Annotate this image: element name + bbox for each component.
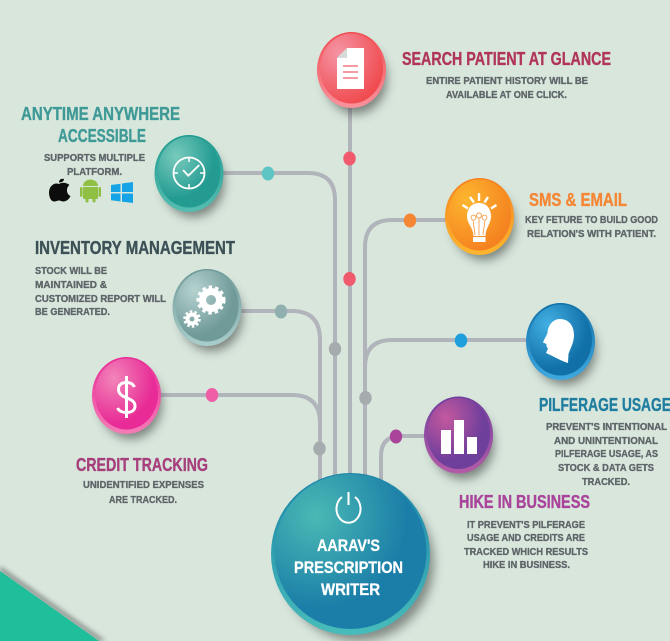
- text: search patient: ENTIRE PATIENT HISTORY WILL BE: [426, 75, 588, 87]
- corner triangle: [0, 566, 106, 641]
- text: inventory: [35, 238, 235, 318]
- node: pilferage usage: [526, 303, 596, 385]
- text: credit tracking: ARE TRACKED.: [109, 494, 177, 506]
- text: hike in business: [459, 492, 590, 571]
- icon: windows: [111, 182, 133, 203]
- main title: PRESCRIPTION: [294, 558, 403, 577]
- node: sms and email: [445, 178, 515, 260]
- text: inventory: MAINTAINED &: [35, 279, 107, 291]
- text: credit tracking: UNIDENTIFIED EXPENSES: [83, 479, 204, 491]
- text: pilferage usage: [539, 395, 670, 488]
- text: pilferage usage: TRACKED.: [582, 476, 630, 488]
- text: hike in business: HIKE IN BUSINESS: [459, 492, 590, 512]
- text: anytime anywhere: [21, 104, 180, 178]
- icon: apple: [49, 179, 70, 202]
- node: anytime anywhere: [154, 135, 224, 217]
- icon: document: [337, 48, 364, 89]
- node: inventory: [172, 269, 242, 351]
- text: anytime anywhere: ACCESSIBLE: [58, 126, 146, 146]
- text: sms and email: [525, 190, 658, 240]
- text: search patient: AVAILABLE AT ONE CLICK.: [446, 89, 567, 101]
- text: search patient: [402, 49, 611, 101]
- connector lines: [158, 100, 530, 490]
- icon: android: [80, 180, 101, 202]
- icon: head silhouette: [543, 319, 574, 363]
- text: hike in business: HIKE IN BUSINESS.: [483, 559, 570, 571]
- text: anytime anywhere: PLATFORM.: [67, 166, 122, 178]
- text: pilferage usage: STOCK & DATA GETS: [558, 462, 654, 474]
- text: hike in business: TRACKED WHICH RESULTS: [464, 546, 588, 558]
- text: hike in business: USAGE AND CREDITS ARE: [467, 532, 585, 544]
- text: inventory: STOCK WILL BE: [35, 265, 107, 277]
- icon: dollar: [118, 376, 135, 418]
- text: anytime anywhere: ANYTIME ANYWHERE: [21, 104, 180, 124]
- node: hike in business: [424, 396, 494, 479]
- text: sms and email: RELATION'S WITH PATIENT.: [527, 228, 656, 240]
- text: credit tracking: CREDIT TRACKING: [76, 455, 208, 475]
- text: inventory: BE GENERATED.: [35, 306, 110, 318]
- node: credit tracking: [92, 357, 162, 439]
- text: hike in business: IT PREVENT'S PILFERAGE: [467, 519, 585, 531]
- text: anytime anywhere: SUPPORTS MULTIPLE: [44, 152, 145, 164]
- node: search patient: [317, 32, 387, 114]
- text: inventory: INVENTORY MANAGEMENT: [35, 238, 235, 258]
- text: search patient: SEARCH PATIENT AT GLANCE: [402, 49, 611, 69]
- main title: WRITER: [321, 580, 380, 599]
- icon: power: [337, 492, 361, 523]
- icon: bar chart: [441, 420, 477, 454]
- text: credit tracking: [76, 455, 208, 506]
- node: main circle: [271, 473, 434, 641]
- text: sms and email: SMS & EMAIL: [529, 190, 627, 210]
- connector dots: [206, 152, 467, 456]
- icon: light bulb: [462, 193, 496, 242]
- icon: clock: [174, 158, 204, 188]
- main title: [294, 536, 403, 599]
- icon: gears: [184, 287, 224, 326]
- text: pilferage usage: AND UNINTENTIONAL: [554, 435, 659, 447]
- text: inventory: CUSTOMIZED REPORT WILL: [35, 293, 167, 305]
- main title: AARAV'S: [317, 536, 380, 555]
